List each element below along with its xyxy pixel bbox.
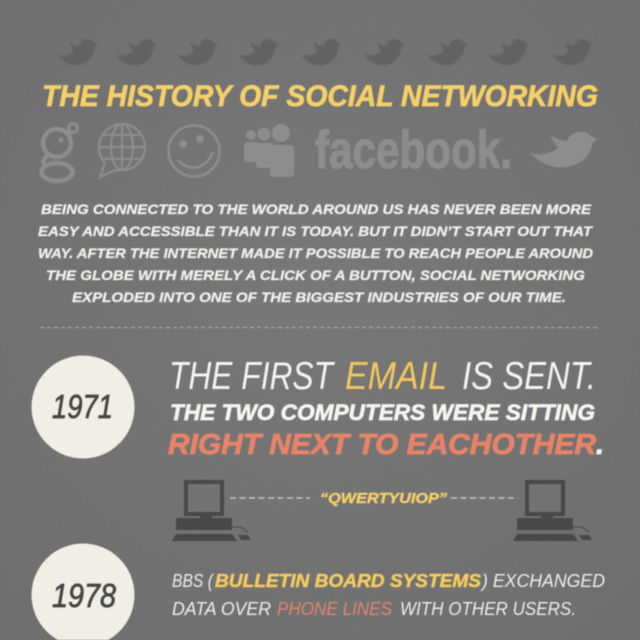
1971 headline: [168, 355, 604, 461]
intro paragraph: [38, 201, 594, 305]
icon: myspace people: [244, 124, 294, 177]
headline line 3: RIGHT NEXT TO EACHOTHER: [168, 429, 596, 461]
headline line 1: THE FIRST: [169, 355, 336, 398]
1978 year badge: 1978: [52, 577, 117, 614]
facebook wordmark: facebook.: [315, 121, 512, 180]
description line 1: BULLETIN BOARD SYSTEMS: [215, 570, 482, 591]
headline line 3: .: [596, 429, 604, 461]
QWERTYUIOP message: “QWERTYUIOP”: [320, 491, 448, 507]
headline line 1: [169, 355, 596, 398]
icon: right computer: [513, 480, 592, 541]
intro paragraph: THE GLOBE WITH MERELY A CLICK OF A BUTTON, SOCIAL NETWORKING: [46, 267, 585, 283]
description line 2: PHONE LINES: [277, 598, 393, 619]
intro paragraph: EXPLODED INTO ONE OF THE BIGGEST INDUSTRIES OF OUR TIME.: [72, 289, 566, 305]
row of small bird icons: [57, 39, 592, 65]
1978 year badge: [32, 544, 134, 640]
description line 1: ) EXCHANGED: [480, 570, 605, 591]
description line 1: [172, 570, 605, 591]
description line 1: BBS (: [172, 570, 215, 591]
description line 2: DATA OVER: [172, 598, 271, 619]
1978 description: [172, 570, 605, 619]
1971 year badge: [32, 356, 134, 458]
intro paragraph: EASY AND ACCESSIBLE THAN IT IS TODAY. BUT IT DIDN’T START OUT THAT: [38, 223, 594, 239]
headline line 2: THE TWO COMPUTERS WERE SITTING: [170, 400, 595, 425]
description line 2: [172, 598, 576, 619]
headline line 1: IS SENT.: [462, 355, 596, 398]
icon: left computer: [172, 480, 251, 541]
icon: g logo: [42, 124, 78, 181]
icon: twitter bird: [530, 132, 597, 167]
icon: smiley: [168, 126, 220, 176]
description line 2: WITH OTHER USERS.: [400, 598, 576, 619]
row of social network logos: [42, 121, 597, 181]
dashed connection right: [451, 497, 518, 499]
headline line 1: EMAIL: [345, 355, 447, 398]
intro paragraph: WAY. AFTER THE INTERNET MADE IT POSSIBLE TO REACH PEOPLE AROUND: [38, 245, 593, 261]
title: THE HISTORY OF SOCIAL NETWORKING: [42, 80, 598, 113]
intro paragraph: BEING CONNECTED TO THE WORLD AROUND US HAS NEVER BEEN MORE: [41, 201, 592, 217]
1971 year badge: 1971: [52, 388, 113, 425]
dashed connection left: [230, 497, 310, 499]
icon: speech globe: [99, 124, 145, 177]
